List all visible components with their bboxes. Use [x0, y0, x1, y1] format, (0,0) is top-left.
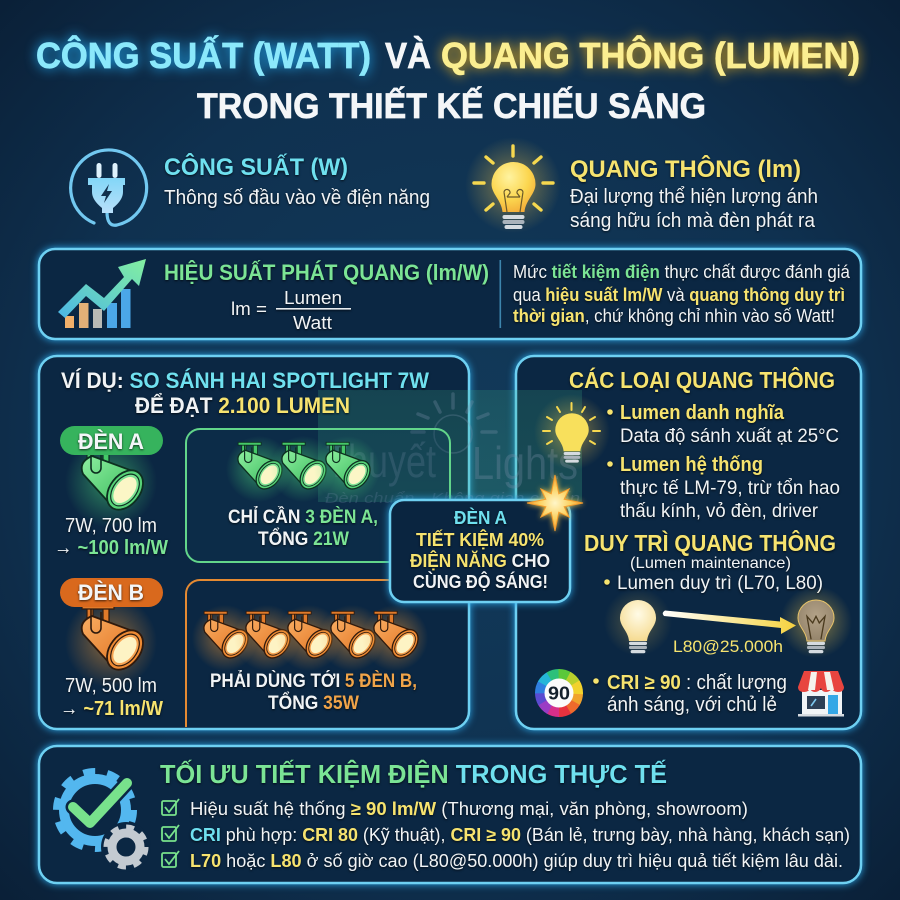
checklist row 2: CRI phù hợp: CRI 80 (Kỹ thuật), CRI ≥ 90 (Bán lẻ, trưng bày, nhà hàng, khách sạn): [190, 825, 850, 845]
title: [36, 34, 860, 126]
heading: lumen types: CÁC LOẠI QUANG THÔNG: [569, 366, 835, 393]
panel: real-world optimisation: [39, 746, 861, 883]
efficacy note: thời gian, chứ không chỉ nhìn vào số Watt!: [513, 305, 835, 326]
callout: 40 percent saving: ĐIỆN NĂNG CHO: [410, 550, 550, 571]
example heading: VÍ DỤ: SO SÁNH HAI SPOTLIGHT 7W: [61, 368, 429, 393]
text: five lamps: [210, 670, 417, 714]
formula: Watt: [293, 313, 332, 333]
heading: lumen maintenance: [584, 529, 836, 594]
icon: growth chart: [58, 259, 146, 328]
list: nominal lumen: Data độ sánh xuất ạt 25°C: [620, 426, 839, 447]
icon: CRI wheel: [540, 674, 578, 712]
box: three lamps A: [186, 429, 450, 562]
list: system lumen: Lumen hệ thống: [620, 454, 763, 476]
panel: luminous efficacy: [39, 249, 861, 339]
box: five lamps B: [186, 580, 428, 727]
icon: gears and check: [56, 772, 151, 872]
callout: 40 percent saving: ĐÈN A: [454, 507, 507, 528]
spec: lamp B: → ~71 lm/W: [60, 698, 163, 720]
icon: yellow bulb: [534, 394, 610, 470]
lamp A column: [54, 426, 168, 559]
checklist row 1: Hiệu suất hệ thống ≥ 90 lm/W (Thương mại, văn phòng, showroom): [190, 799, 748, 819]
heading: lumen maintenance: DUY TRÌ QUANG THÔNG: [584, 529, 836, 556]
efficacy note: [513, 261, 851, 326]
panel: lumen types: [516, 356, 861, 729]
list: system lumen: thấu kính, vỏ đèn, driver: [620, 501, 819, 522]
heading: quang thông: [570, 155, 818, 232]
diagram: bulb decay: [604, 586, 852, 658]
text: five lamps: PHẢI DÙNG TỚI 5 ĐÈN B,: [210, 670, 417, 692]
title: TRONG THIẾT KẾ CHIẾU SÁNG: [197, 86, 706, 126]
badge: lamp A: ĐÈN A: [78, 429, 144, 454]
icon: power plug: [71, 150, 147, 225]
text: three lamps: [228, 506, 378, 550]
text: five lamps: TỔNG 35W: [268, 692, 359, 714]
text: three lamps: TỔNG 21W: [258, 528, 349, 550]
badge: lamp B: [60, 578, 163, 607]
watermark: Thuyết: [326, 435, 436, 487]
callout: 40 percent saving: CÙNG ĐỘ SÁNG!: [413, 571, 548, 592]
title: CÔNG SUẤT (WATT): [36, 34, 371, 76]
heading: lumen maintenance: (Lumen maintenance): [630, 555, 791, 572]
efficacy note: qua hiệu suất lm/W và quang thông duy trì: [513, 284, 845, 305]
icon: five orange spotlights: [192, 605, 428, 671]
efficacy note: Mức tiết kiệm điện thực chất được đánh giá: [513, 261, 851, 282]
icon: lamp A: [65, 436, 157, 528]
heading: công suất: CÔNG SUẤT (W): [164, 153, 348, 181]
icon: lamp B: [65, 596, 157, 688]
icon: three green spotlights: [226, 436, 380, 502]
list: CRI: ánh sáng, với chủ lẻ: [607, 694, 777, 716]
example heading: [61, 368, 429, 418]
title: QUANG THÔNG (LUMEN): [441, 34, 860, 76]
list: system lumen: thực tế LM-79, trừ tổn hao: [620, 478, 840, 499]
spec: lamp A: 7W, 700 lm: [65, 515, 157, 537]
callout: 40 percent saving: TIẾT KIỆM 40%: [416, 529, 544, 550]
heading: quang thông: QUANG THÔNG (lm): [570, 155, 801, 183]
lamp B column: [60, 578, 163, 720]
spec: lamp B: [60, 675, 163, 720]
spec: lamp A: → ~100 lm/W: [54, 537, 168, 559]
formula: lm =: [231, 299, 267, 319]
heading: công suất: Thông số đầu vào về điện năng: [164, 187, 430, 209]
lumen types content: [534, 366, 852, 716]
list: nominal lumen: [607, 402, 839, 447]
heading: optimisation: TỐI ƯU TIẾT KIỆM ĐIỆN TRONG THỰC TẾ: [160, 759, 667, 789]
diagram: bulb decay: L80@25.000h: [673, 637, 783, 656]
example heading: ĐỂ ĐẠT 2.100 LUMEN: [135, 393, 350, 418]
badge: lamp B: ĐÈN B: [78, 580, 144, 605]
icon: CRI wheel: 90: [548, 684, 570, 704]
list: CRI: [593, 672, 787, 716]
watermark: Lights: [472, 437, 578, 489]
icon: storefront: [798, 671, 844, 716]
panel: comparison example: [39, 356, 469, 729]
spec: lamp A: [54, 515, 168, 559]
list: CRI: CRI ≥ 90 : chất lượng: [607, 672, 787, 694]
heading: công suất: [164, 153, 430, 209]
icon: burst star: [527, 475, 583, 531]
title: VÀ: [385, 35, 431, 76]
text: three lamps: CHỈ CẦN 3 ĐÈN A,: [228, 506, 378, 528]
icon: glowing bulb: [465, 137, 561, 233]
watermark: Đèn chuẩn - Không gian chuẩn: [325, 490, 580, 507]
list: nominal lumen: Lumen danh nghĩa: [620, 402, 785, 424]
heading: efficacy: HIỆU SUẤT PHÁT QUANG (lm/W): [164, 260, 489, 285]
formula: Lumen: [284, 288, 342, 308]
callout: 40 percent saving: [390, 500, 570, 602]
heading: quang thông: Đại lượng thể hiện lượng ánh: [570, 186, 818, 208]
formula: [231, 288, 351, 333]
checklist row 3: L70 hoặc L80 ở số giờ cao (L80@50.000h) giúp duy trì hiệu quả tiết kiệm lâu dài.: [190, 851, 843, 871]
list: system lumen: [607, 454, 840, 522]
heading: quang thông: sáng hữu ích mà đèn phát ra: [570, 210, 816, 232]
watermark: [318, 390, 582, 507]
spec: lamp B: 7W, 500 lm: [65, 675, 157, 697]
heading: lumen maintenance: Lumen duy trì (L70, L80): [617, 573, 823, 594]
